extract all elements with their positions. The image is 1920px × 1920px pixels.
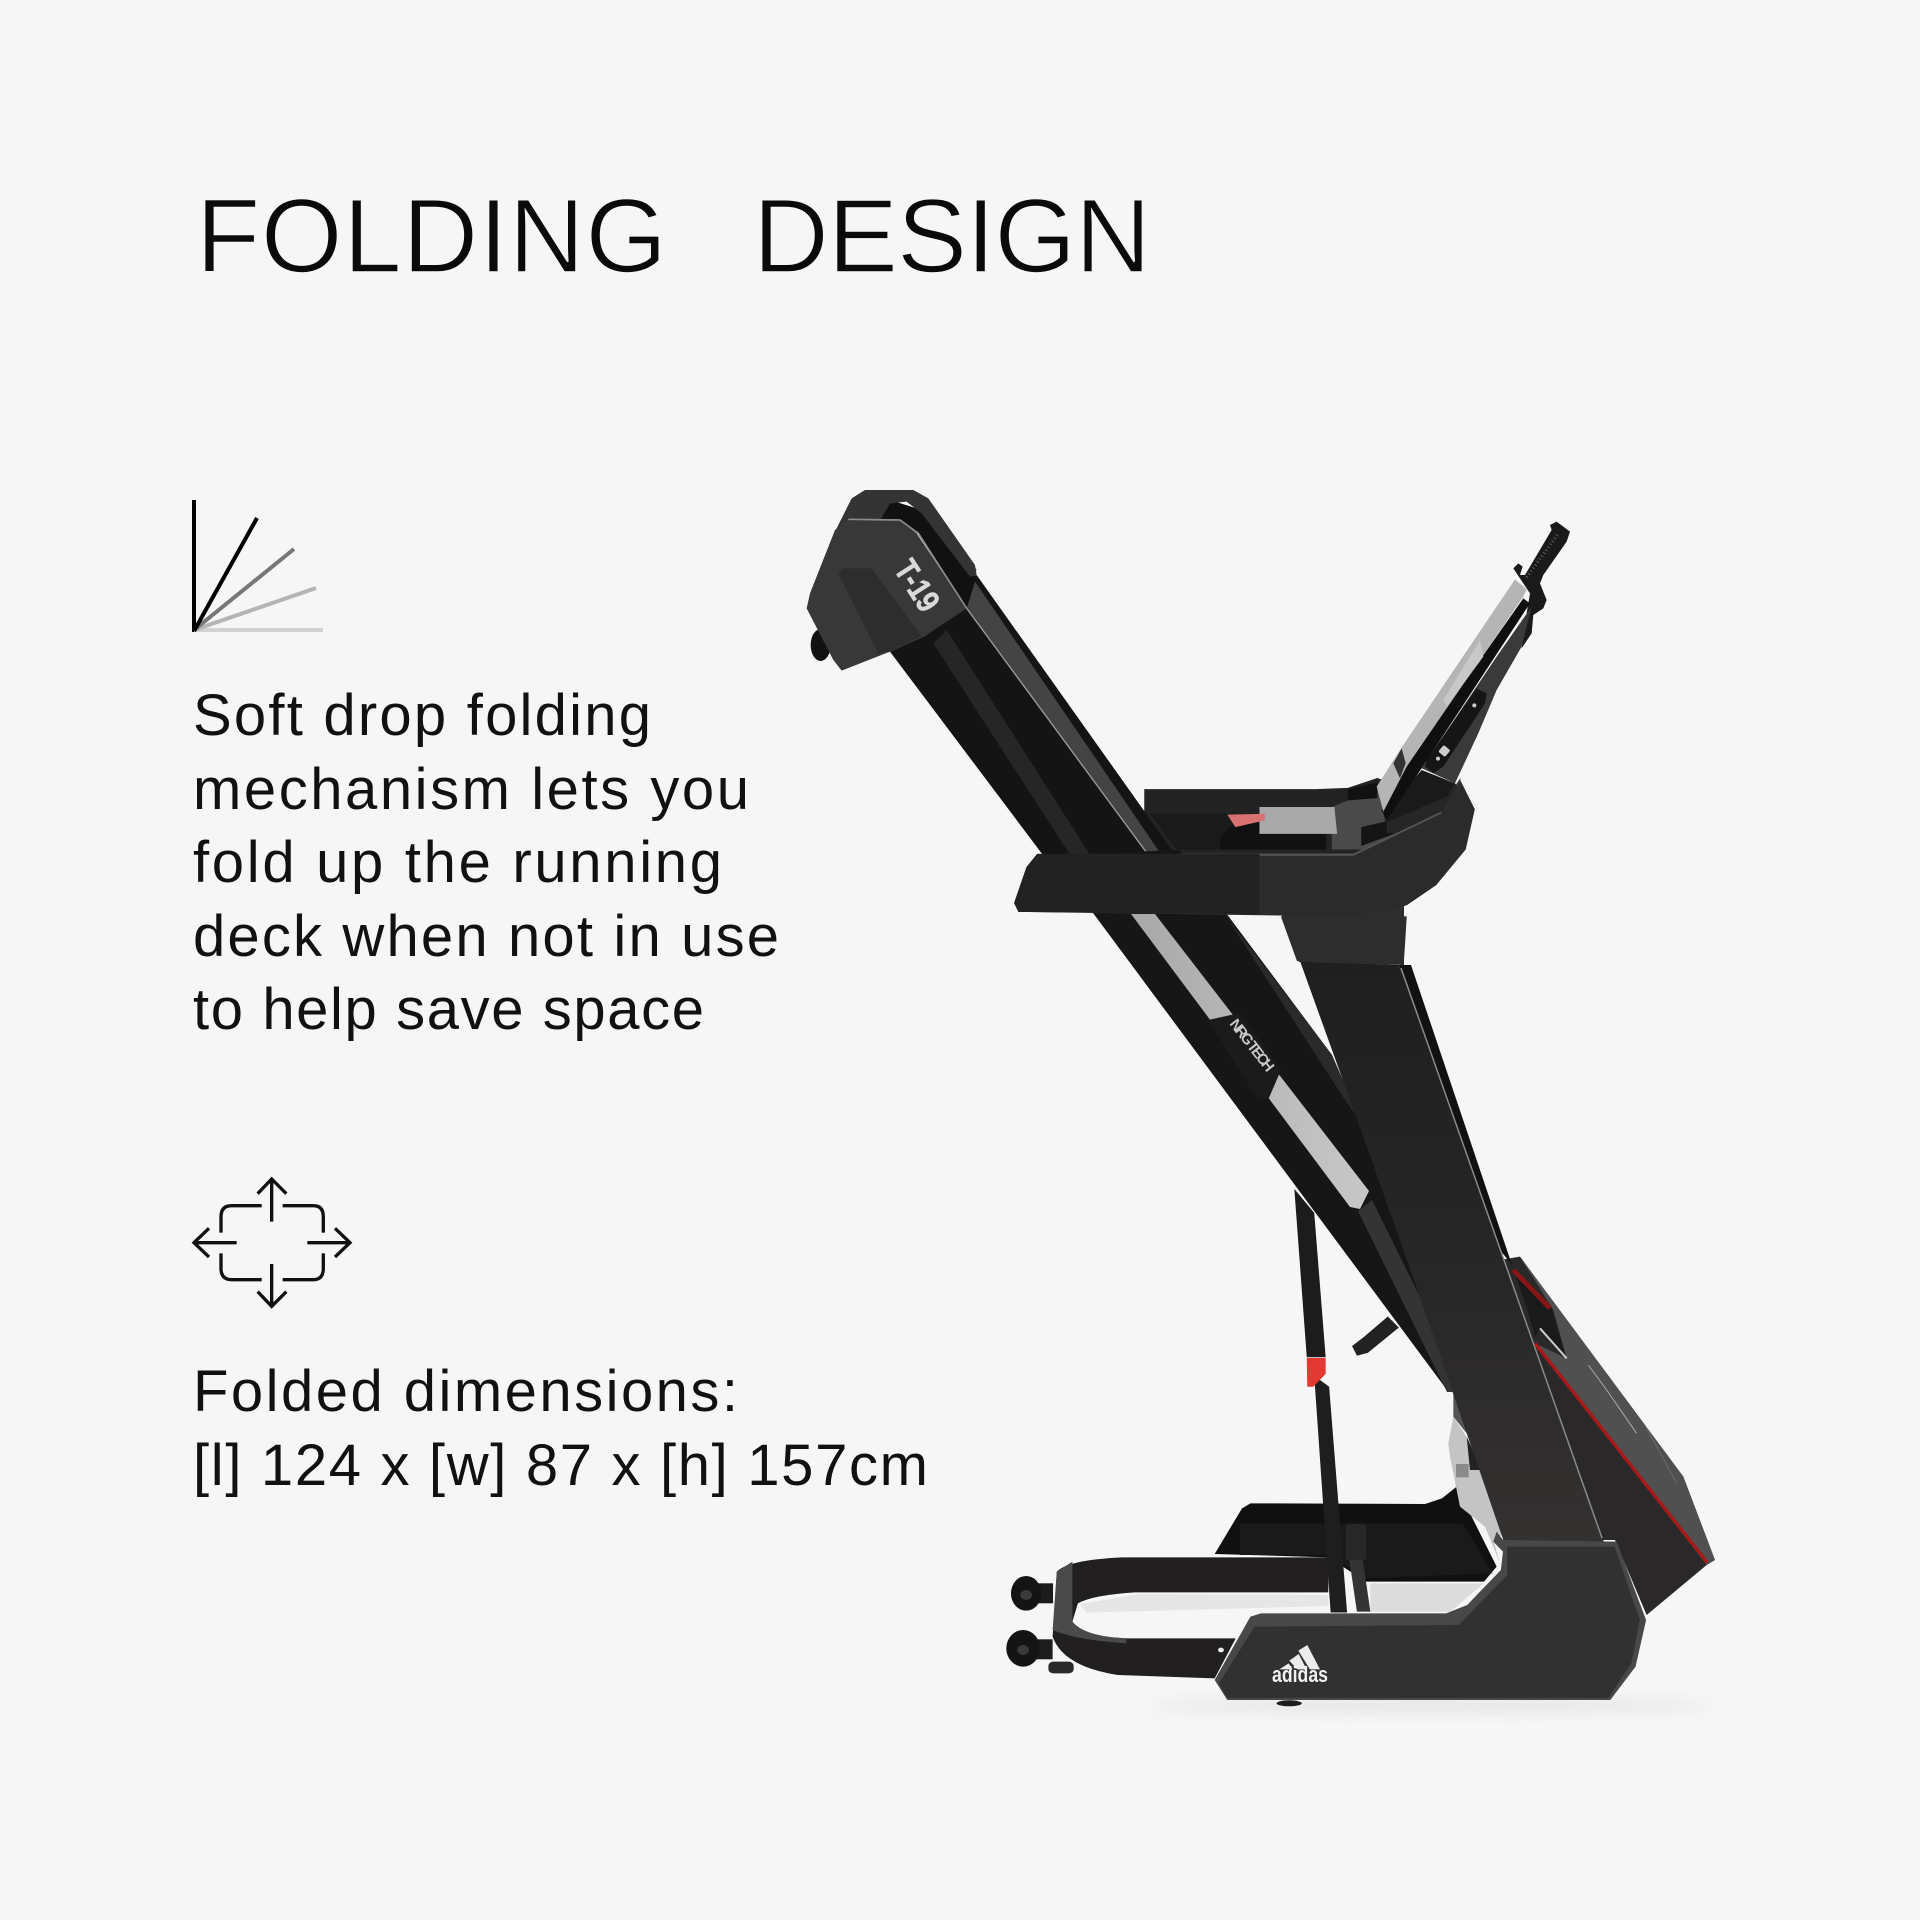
running deck — [890, 510, 1500, 1392]
base foot with adidas logo: adidas — [1272, 1662, 1328, 1687]
deck silver side stripe — [1131, 914, 1369, 1209]
base foot with adidas logo — [1215, 1532, 1646, 1706]
NRG TECH badge: NRG TECH — [1226, 1016, 1277, 1075]
lower deck rail — [1358, 1200, 1458, 1392]
title — [196, 178, 1151, 295]
text block: folded dimensions: [l] 124 x [w] 87 x [h] 157cm — [193, 1433, 928, 1498]
text block: folded dimensions: Folded dimensions: — [193, 1359, 738, 1424]
tablet console and top hook — [1377, 522, 1570, 833]
console tray — [1144, 778, 1466, 854]
text block: folding mechanism description: to help save space — [193, 977, 704, 1042]
handrail front arm — [1014, 780, 1475, 961]
text block: folded dimensions — [193, 1359, 928, 1498]
bottom rear tray frame — [1215, 1487, 1497, 1612]
upright column — [1278, 905, 1605, 1545]
icon: expanding dimensions arrows — [194, 1178, 350, 1307]
support strut with red collar — [1294, 1189, 1399, 1612]
title: FOLDING — [196, 178, 667, 295]
rear motor cover with red strip — [1500, 1257, 1715, 1615]
title: DESIGN — [753, 178, 1151, 295]
text block: folding mechanism description: deck when not in use — [193, 904, 779, 969]
floor shadow — [1150, 1700, 1710, 1712]
deck end cap — [807, 490, 977, 671]
silver rear bracket — [1448, 1393, 1505, 1563]
text block: folding mechanism description — [193, 683, 779, 1042]
adidas three bars — [1279, 1645, 1320, 1669]
text block: folding mechanism description: mechanism lets you — [193, 757, 749, 822]
icon: folding angle lines — [194, 500, 323, 632]
treadmill folded side view — [807, 490, 1715, 1712]
NRG TECH badge — [1208, 1013, 1281, 1100]
front U frame with wheels — [1006, 1557, 1328, 1678]
T-19 label: T-19 — [887, 553, 948, 618]
text block: folding mechanism description: Soft drop folding — [193, 683, 651, 748]
text block: folding mechanism description: fold up the running — [193, 830, 722, 895]
